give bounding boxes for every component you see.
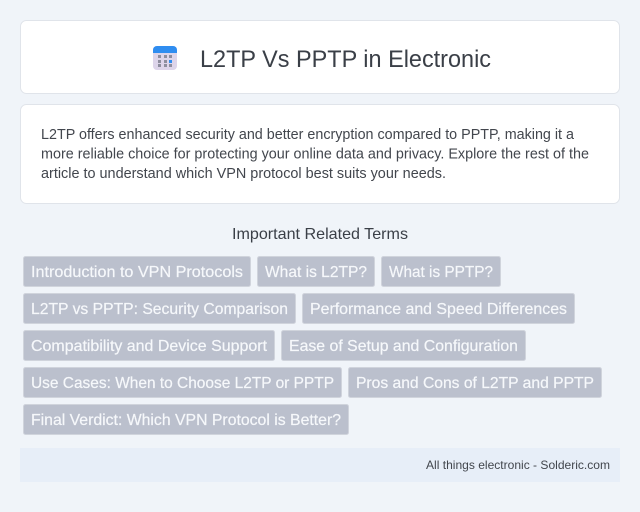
tag: final verdict: Final Verdict: Which VPN Protocol is Better? xyxy=(31,412,341,429)
panel: introduction text: article to understand which VPN protocol best suits your needs. xyxy=(41,166,446,182)
tag: security comparison xyxy=(24,294,296,324)
footer: All things electronic - Solderic.com xyxy=(426,458,610,472)
tag: final verdict xyxy=(24,404,348,434)
tag: compatibility xyxy=(24,330,274,360)
tag: security comparison: L2TP vs PPTP: Security Comparison xyxy=(31,301,288,318)
tag: performance: Performance and Speed Differences xyxy=(310,301,567,318)
tag: compatibility: Compatibility and Device Support xyxy=(31,338,268,355)
tag: ease of setup: Ease of Setup and Configuration xyxy=(289,338,518,355)
panel: introduction text xyxy=(20,104,620,204)
panel: introduction text: more reliable choice for protecting your online data and privacy. Explore the rest of the xyxy=(41,146,589,162)
footer xyxy=(20,448,620,482)
title panel xyxy=(20,20,620,94)
heading: related terms: Important Related Terms xyxy=(232,226,408,243)
panel: introduction text: L2TP offers enhanced security and better encryption compared to PPTP, making it a xyxy=(41,127,575,143)
tag: use cases xyxy=(24,368,342,398)
tag: pros and cons: Pros and Cons of L2TP and PPTP xyxy=(356,375,594,392)
tag: use cases: Use Cases: When to Choose L2TP or PPTP xyxy=(31,375,334,392)
tag: ease of setup xyxy=(282,330,526,360)
tag: introduction xyxy=(24,256,250,286)
tag: what is PPTP xyxy=(382,256,500,286)
tag: introduction: Introduction to VPN Protocols xyxy=(31,264,243,281)
title: L2TP Vs PPTP in Electronic xyxy=(200,46,491,73)
tag: performance xyxy=(302,294,574,324)
icon: calendar xyxy=(153,46,177,70)
tag: what is L2TP xyxy=(258,256,374,286)
tag: what is PPTP: What is PPTP? xyxy=(389,264,493,281)
tag: what is L2TP: What is L2TP? xyxy=(265,264,367,281)
tag: pros and cons xyxy=(348,368,602,398)
tag list xyxy=(24,256,602,434)
